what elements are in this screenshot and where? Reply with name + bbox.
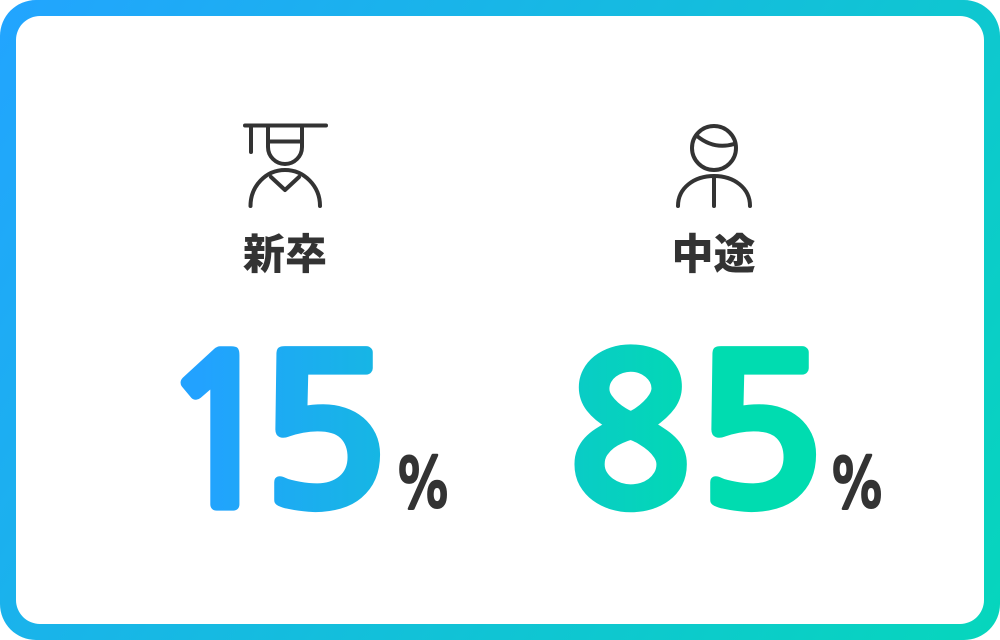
number: 85: 5 bbox=[692, 333, 827, 537]
percent sign left: % bbox=[394, 452, 453, 519]
number: 85: 8 bbox=[567, 332, 692, 538]
number: 15 bbox=[158, 332, 391, 538]
icon: graduate bbox=[245, 126, 326, 206]
icon: mid-career person bbox=[678, 126, 750, 206]
percent sign right: % bbox=[828, 452, 887, 519]
number: 15: 1 bbox=[158, 332, 283, 538]
number: 85 bbox=[567, 332, 827, 538]
label: 新卒: 新卒 bbox=[243, 221, 327, 282]
number: 15: 5 bbox=[256, 333, 391, 537]
label: 中途: 中途 bbox=[671, 221, 756, 282]
